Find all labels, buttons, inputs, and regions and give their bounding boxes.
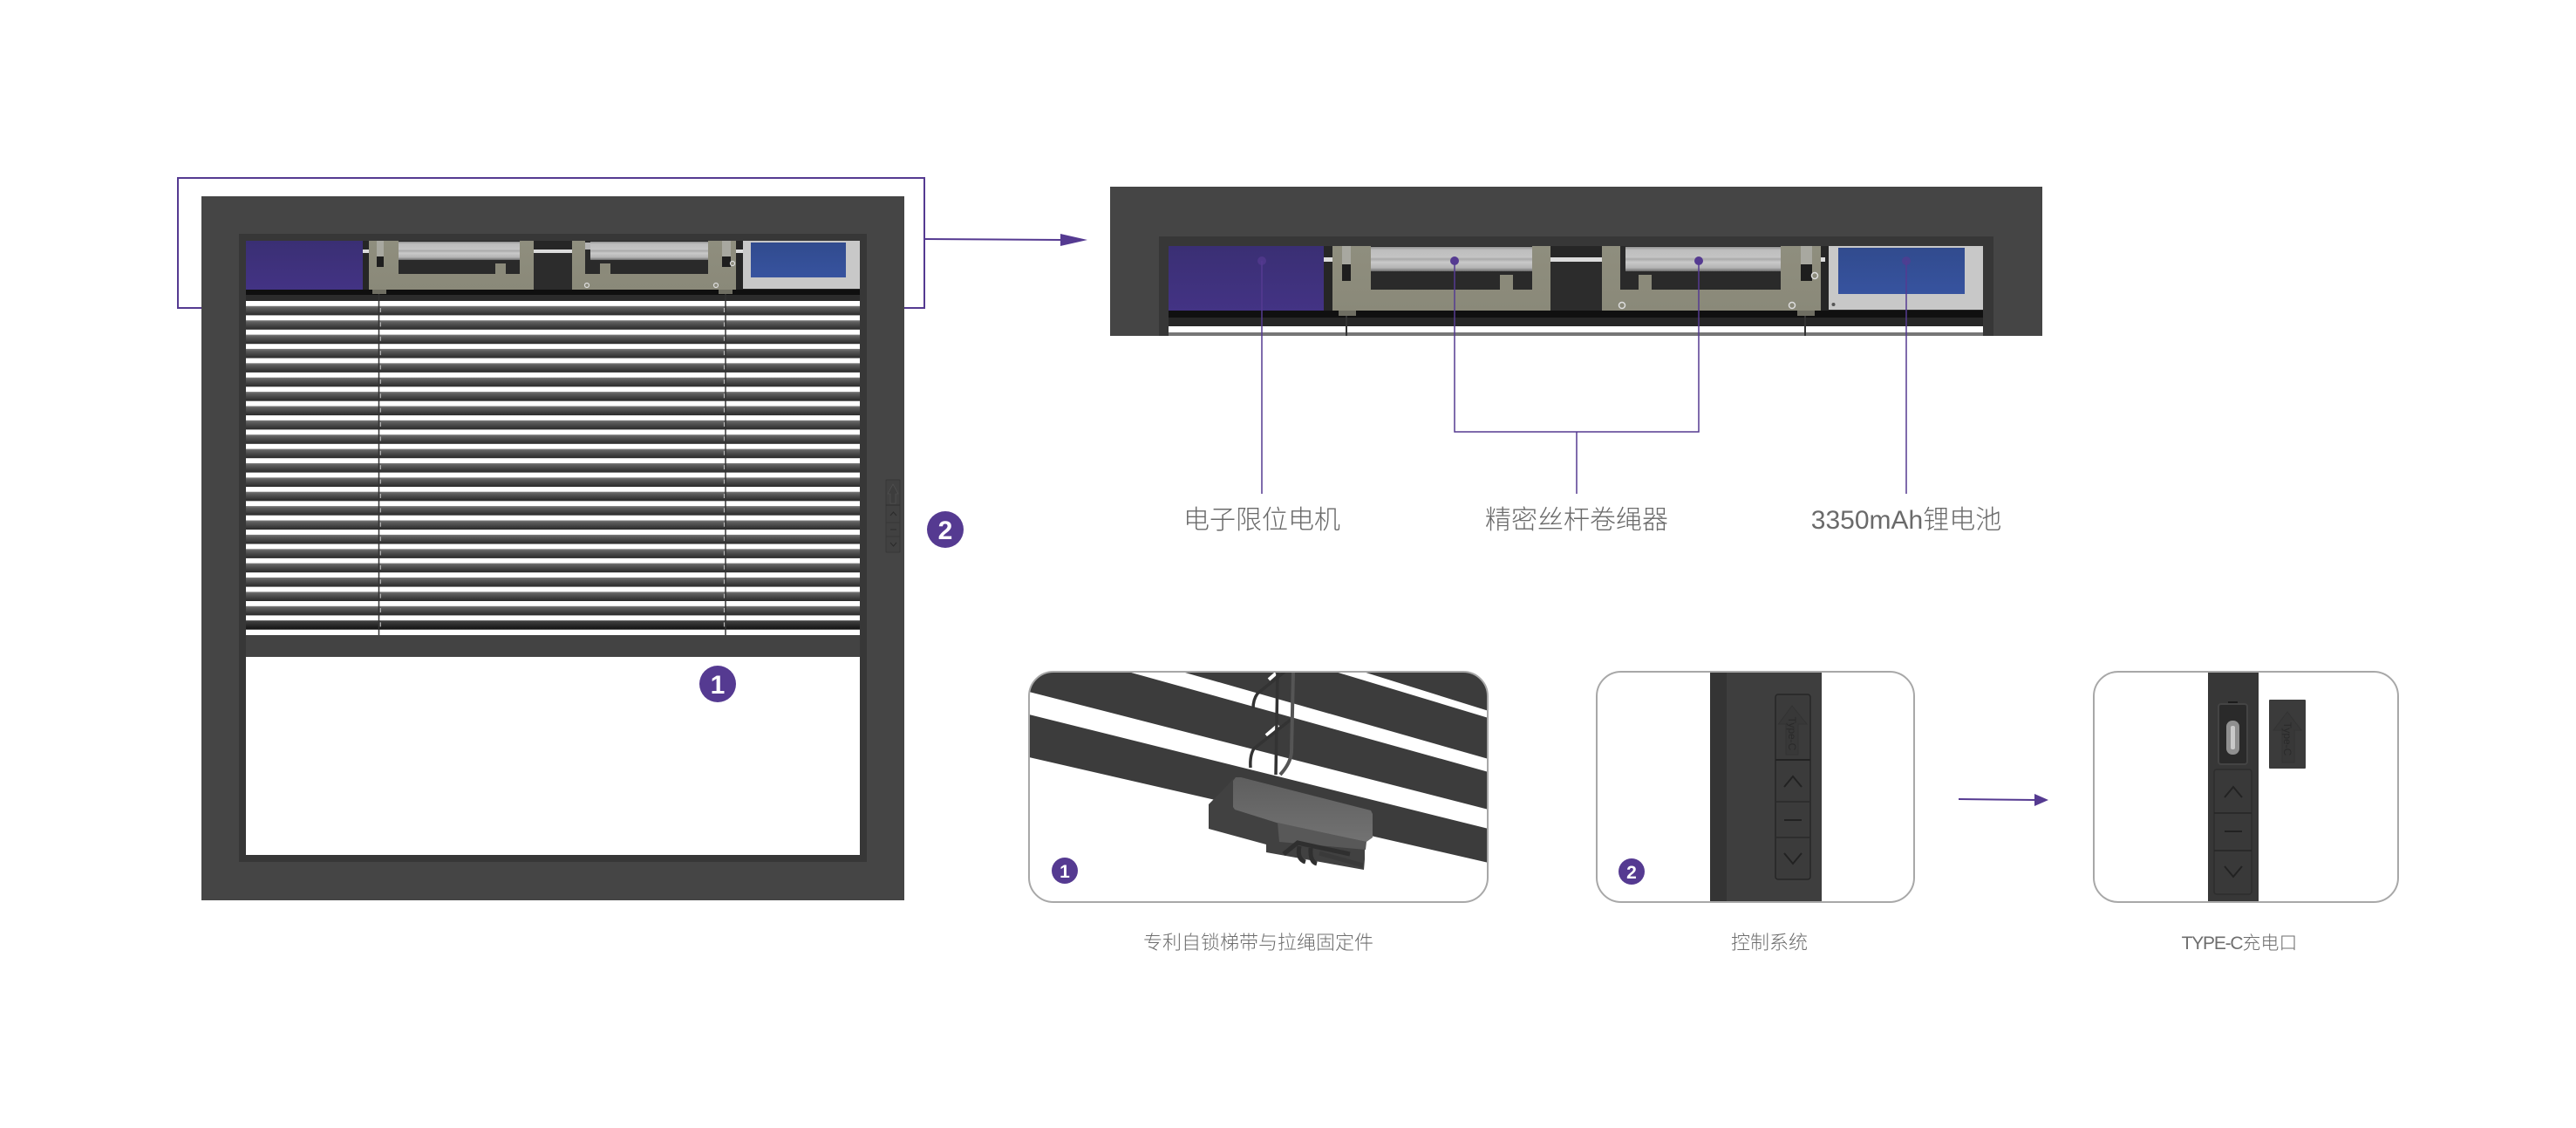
badge 2 on blind [927,511,964,548]
battery [743,241,860,289]
badge 1 on blind: 1 [711,671,725,700]
buttons [2214,769,2252,894]
label: motor: 电子限位电机 [1183,506,1340,535]
ladder cords [1251,672,1291,775]
clip: lower block [1278,823,1366,850]
battery [1829,246,1983,310]
caption: card 1: 专利自锁梯带与拉绳固定件 [1143,932,1373,954]
badge 1 on blind [699,666,736,702]
slats [1028,671,1489,863]
leader line: motor [1257,256,1266,494]
label: winder: 精密丝杆卷绳器 [1485,506,1668,535]
lead-screw winder right [1602,246,1821,336]
winder left [369,241,534,294]
lower glass area [246,657,860,855]
headrail mechanism [246,241,860,301]
frame recess [239,234,867,862]
card border [1029,672,1488,902]
lead-screw winder left [1332,246,1550,336]
control buttons: Type-C [1786,717,1798,751]
removable cover: Type-C [2281,722,2293,756]
card border [1597,672,1914,902]
detail frame [1110,187,2042,336]
panel: card 2 control system [1597,671,1914,903]
removable cover [2269,700,2306,769]
badge: 1 [1060,862,1070,882]
detail recess [1159,236,1993,336]
control buttons [1775,694,1810,879]
badge 2 on blind: 2 [938,516,952,545]
ladder tape white gaps [1266,673,1278,735]
panel: full blind in window frame [201,196,904,900]
card border [2094,672,2398,902]
badge [1052,858,1078,884]
badge: 2 [1626,863,1637,883]
clip: back plate [1209,799,1366,870]
electronic limit motor [246,241,363,290]
panel: headrail detail [1110,187,2042,336]
badge [1619,858,1645,885]
leader line: battery [1902,256,1911,494]
USB-C port [2218,701,2247,764]
caption: card 2: 控制系统 [1731,932,1808,954]
winder right [572,241,736,294]
caption: card 3: TYPE-C充电口 [2182,933,2297,954]
leader line: winders [1450,256,1703,494]
arrow: to headrail detail [924,234,1087,246]
clip: front block [1233,777,1373,842]
blind slats [246,294,860,635]
clip: knot and cords [1284,843,1363,865]
selection box around headrail [178,178,924,308]
panel: card 3 Type-C port [2094,671,2398,903]
label: battery: 3350mAh锂电池 [1811,506,2001,535]
window frame [201,196,904,900]
panel: card 1 self-locking ladder tape [1028,671,1489,902]
motor [1169,246,1324,311]
side control buttons [886,480,900,552]
bottom rail [246,635,860,657]
arrow: card 2 to card 3 [1959,794,2048,806]
pull cord [1280,672,1293,775]
